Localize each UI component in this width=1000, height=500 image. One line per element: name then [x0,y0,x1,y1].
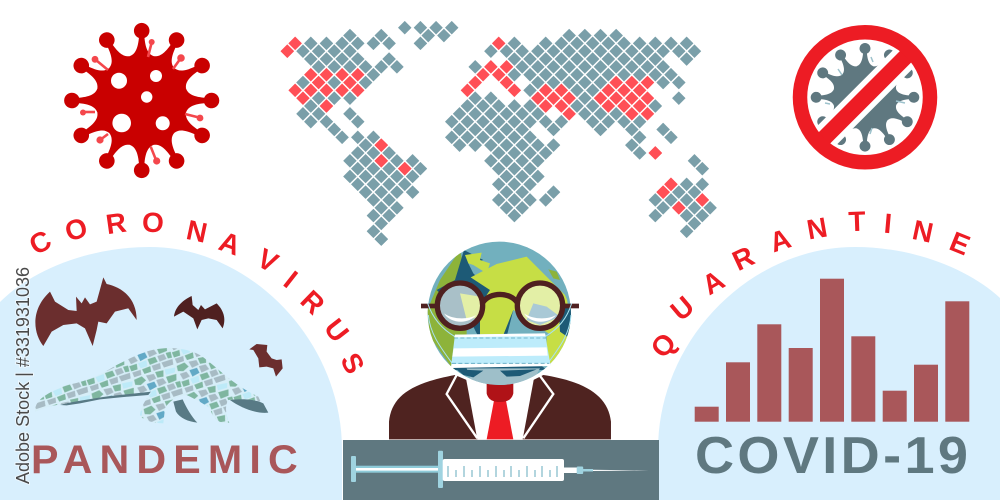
heading: QUARANTINE arc: N [910,214,936,249]
icon: pangolin [35,348,268,423]
icon: no virus sign [800,32,930,162]
heading: QUARANTINE arc: A [697,264,730,301]
panel: right covid dome [658,247,1000,500]
panel: left pandemic dome [0,247,342,500]
label: PANDEMIC: PANDEMIC [31,437,298,482]
suit [389,375,611,439]
icon: medium bat [174,296,224,329]
heading: CORONAVIRUS arc: R [295,284,331,321]
heading: QUARANTINE arc: R [727,240,759,277]
globe [427,240,573,387]
heading: QUARANTINE arc: U [665,290,700,327]
heading: CORONAVIRUS arc: N [184,214,210,249]
heading: QUARANTINE arc: E [945,226,974,261]
panel: desk [343,440,659,500]
face mask [428,303,572,368]
heading: CORONAVIRUS arc: V [252,242,284,279]
heading: CORONAVIRUS arc: C [24,224,56,261]
heading: QUARANTINE arc [645,206,974,364]
heading: CORONAVIRUS arc: A [215,225,245,261]
heading: CORONAVIRUS arc: R [104,207,128,240]
icon: syringe [351,451,649,488]
map land cells [303,28,710,239]
heading: CORONAVIRUS arc [24,207,371,379]
bar chart: covid cases [695,279,969,422]
heading: QUARANTINE arc: Q [645,327,682,364]
heading: CORONAVIRUS arc: O [142,207,164,238]
heading: CORONAVIRUS arc: U [318,313,355,348]
label: COVID-19: COVID-19 [695,427,968,485]
glasses [421,282,579,328]
heading: CORONAVIRUS arc: I [278,265,303,294]
icon: bats and pangolin [35,277,283,423]
chart: dotted world map [287,28,710,239]
heading: CORONAVIRUS arc: S [334,348,371,379]
icon: small bat [249,344,283,377]
heading: CORONAVIRUS arc: O [61,211,91,247]
tie [487,383,513,439]
lapels [447,375,553,438]
heading: QUARANTINE arc: A [766,223,795,258]
figure: globe presenter [389,240,611,439]
watermark: stock id: Adobe Stock | #331931036 [13,267,33,484]
icon: large bat [35,277,137,346]
heading: QUARANTINE arc: T [848,206,866,237]
heading: QUARANTINE arc: I [883,208,893,239]
icon: red coronavirus [64,23,219,178]
map affected cells [287,43,702,208]
heading: QUARANTINE arc: N [804,211,830,246]
shirt [466,378,534,439]
